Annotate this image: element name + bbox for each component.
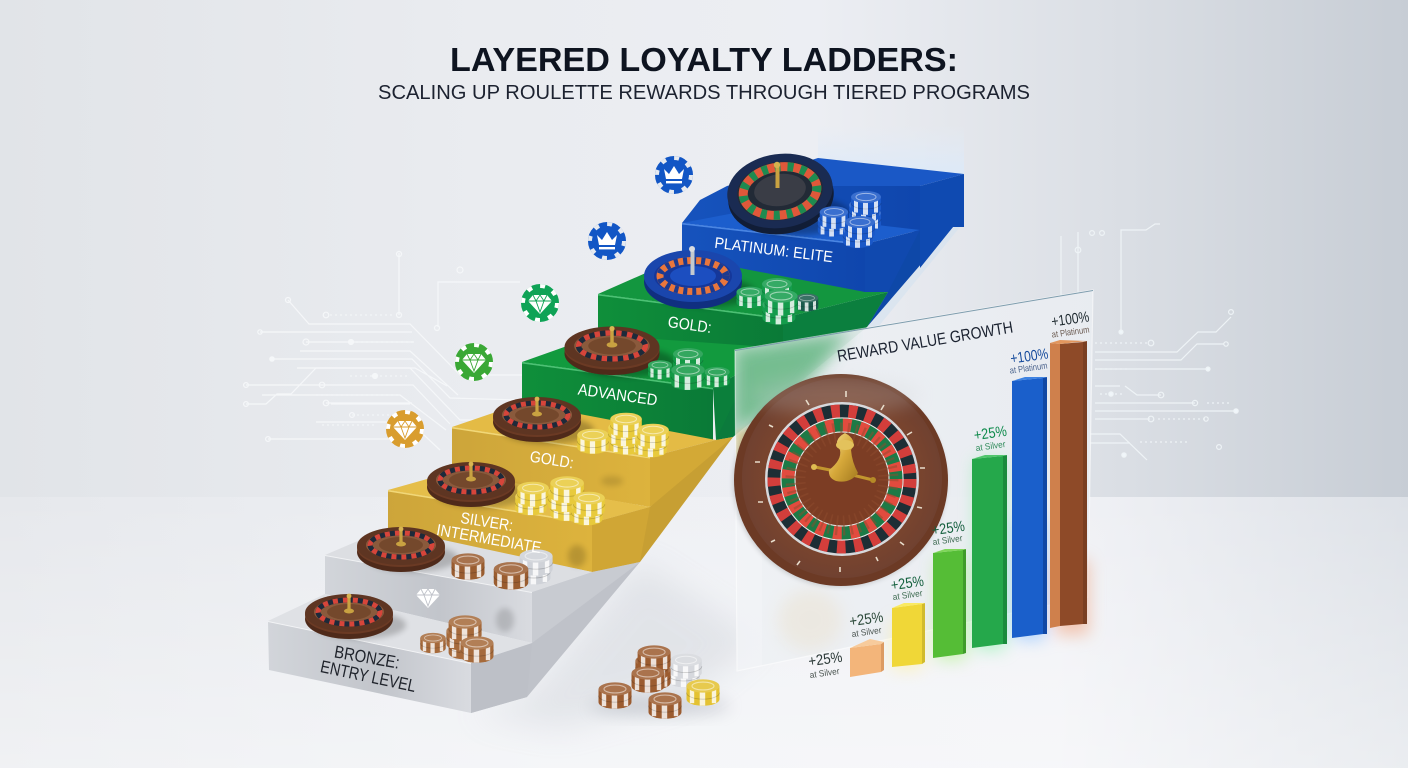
title xyxy=(378,41,1030,104)
icon: green diamond chip lower xyxy=(457,345,491,379)
roulette wheels on steps xyxy=(305,147,839,639)
wheel: silver xyxy=(357,527,445,572)
chips: gold lower xyxy=(515,476,605,525)
step: silver lower xyxy=(268,594,532,713)
staircase xyxy=(268,158,964,713)
icon: blue crown chip upper xyxy=(657,158,691,192)
chips: green lower xyxy=(648,348,730,390)
title: LAYERED LOYALTY LADDERS: xyxy=(450,41,958,78)
label: bar 5: +25% xyxy=(973,423,1008,444)
wheel: platinum dark xyxy=(722,147,839,241)
step: gold upper xyxy=(452,403,733,507)
step label: bronze entry level: BRONZE: xyxy=(333,642,401,673)
bar: peach xyxy=(850,639,884,677)
step: green upper xyxy=(598,257,888,348)
spindle xyxy=(811,433,876,483)
circuit lines right xyxy=(1061,224,1238,460)
chips: bronze xyxy=(420,615,494,663)
label: bar 4: at Silver xyxy=(932,533,963,547)
step label: advanced: ADVANCED xyxy=(577,382,658,410)
icon: blue crown chip lower xyxy=(590,224,624,258)
bar: yellow xyxy=(892,603,925,667)
step label: platinum elite: PLATINUM: ELITE xyxy=(713,235,834,266)
riser shadows xyxy=(314,195,850,639)
chips: gold upper xyxy=(577,413,669,457)
label: bar 7: at Platinum xyxy=(1051,324,1090,340)
step label: silver intermediate: SILVER: xyxy=(459,510,514,535)
chips: platinum xyxy=(818,191,881,248)
panel title: REWARD VALUE GROWTH xyxy=(836,319,1014,366)
background floor xyxy=(0,497,1408,768)
step: gold lower xyxy=(388,472,650,572)
label: bar 2 xyxy=(848,609,884,639)
label: bar 7 xyxy=(1050,308,1090,340)
step label: bronze entry level: ENTRY LEVEL xyxy=(319,656,418,696)
label: bar 4 xyxy=(931,518,966,547)
label: bar 6 xyxy=(1009,345,1049,376)
label: bar 5 xyxy=(973,423,1008,453)
wheel: bronze xyxy=(305,594,393,639)
glow under bars xyxy=(892,460,1089,670)
background wall xyxy=(0,0,1408,497)
step label: bronze entry level xyxy=(319,642,418,696)
wheel: gold upper xyxy=(493,397,581,442)
step label: gold: GOLD: xyxy=(529,449,575,472)
bar chart xyxy=(850,340,1089,677)
icon: gold diamond chip xyxy=(388,412,422,446)
label: bar 6: +100% xyxy=(1009,345,1049,368)
label: bar 4: +25% xyxy=(931,518,966,539)
chips: silver xyxy=(452,549,553,590)
step label: silver intermediate xyxy=(435,510,542,557)
bar value labels xyxy=(807,308,1090,680)
chip stacks on steps xyxy=(420,191,881,663)
icon: diamond on silver step xyxy=(416,589,440,608)
step: green lower xyxy=(522,335,783,440)
chip pile on floor xyxy=(598,645,720,719)
step: top blue xyxy=(682,158,964,268)
step: platinum xyxy=(682,210,920,293)
label: bar 3: at Silver xyxy=(892,588,923,602)
large roulette wheel xyxy=(734,374,948,586)
wheel: green lower xyxy=(564,326,660,375)
bar: blue xyxy=(1012,377,1047,638)
label: bar 7: +100% xyxy=(1050,308,1090,331)
step: silver upper xyxy=(325,528,640,643)
bar: green xyxy=(972,455,1007,648)
label: bar 6: at Platinum xyxy=(1009,360,1048,376)
label: bar 1: +25% xyxy=(807,649,843,670)
panel glass xyxy=(732,290,1093,671)
label: bar 1 xyxy=(807,649,843,680)
label: bar 2: +25% xyxy=(848,609,884,630)
circuit lines left xyxy=(244,252,540,450)
label: bar 5: at Silver xyxy=(975,439,1006,453)
wheel: green upper blue rim xyxy=(644,246,742,309)
rim ticks xyxy=(755,391,925,572)
label: bar 1: at Silver xyxy=(809,666,840,680)
bar: copper xyxy=(1050,340,1087,628)
icon: green diamond chip upper xyxy=(523,286,557,320)
label: bar 2: at Silver xyxy=(851,625,882,639)
top glow above the highest step xyxy=(818,125,964,176)
wheel: gold lower xyxy=(427,462,515,507)
label: bar 3 xyxy=(890,573,925,602)
step label: silver intermediate: INTERMEDIATE xyxy=(435,522,542,557)
bar: light green xyxy=(933,549,966,658)
chips: green upper xyxy=(736,278,818,325)
title: SCALING UP ROULETTE REWARDS THROUGH TIERED PROGRAMS xyxy=(378,82,1030,104)
panel: reward value growth xyxy=(732,290,1093,680)
support: underside xyxy=(471,562,640,713)
label: bar 3: +25% xyxy=(890,573,925,594)
step label: gold on green: GOLD: xyxy=(667,314,713,337)
floor shadows xyxy=(471,562,760,730)
